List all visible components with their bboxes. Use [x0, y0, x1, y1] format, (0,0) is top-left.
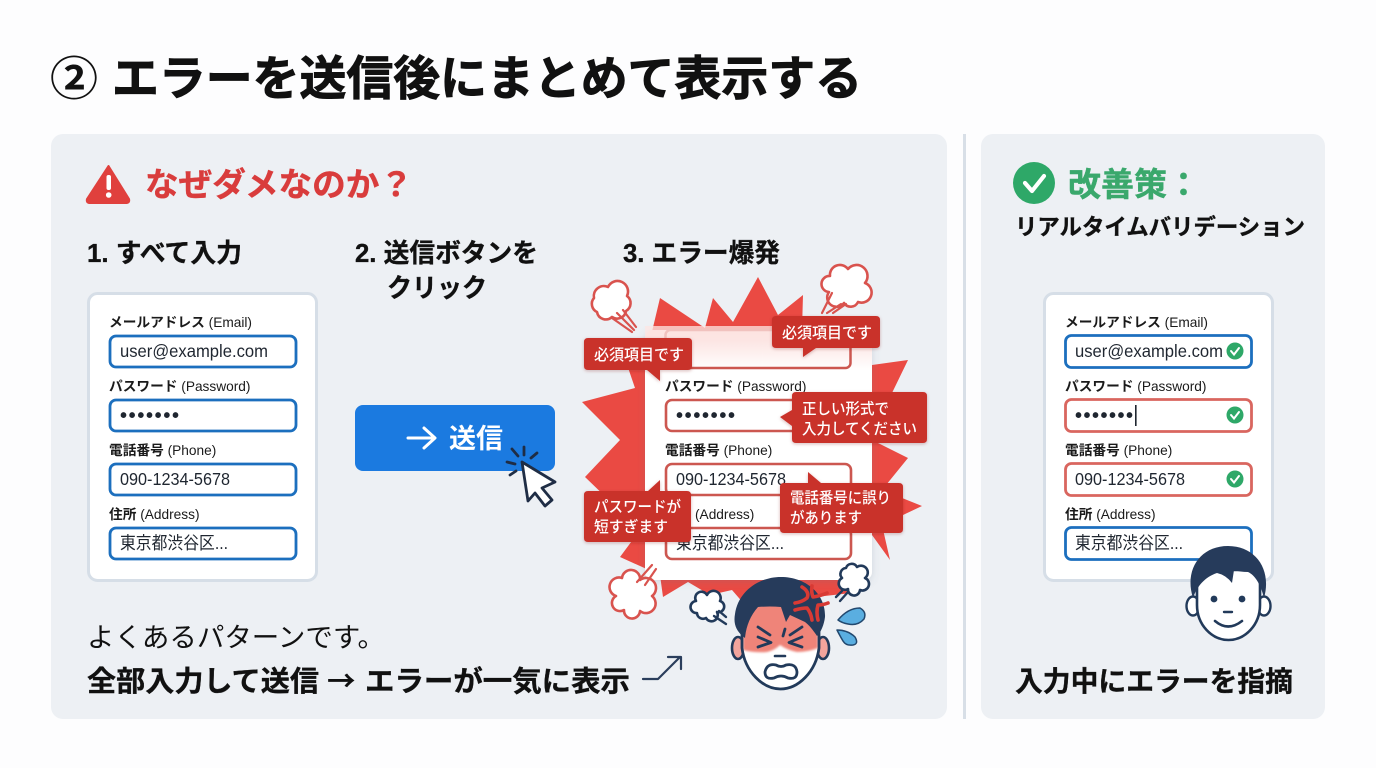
icon: dark puff right of face — [836, 564, 869, 601]
step 2 heading: クリック — [387, 273, 487, 303]
form: step 1: 090-1234-5678 — [120, 469, 230, 489]
text cursor — [1135, 405, 1137, 426]
button: send — [355, 405, 555, 471]
icon: mouse cursor with click rays — [507, 447, 555, 506]
icon: red puff top-right — [821, 265, 872, 313]
icon: green check — [1013, 162, 1055, 204]
error bubble: password too short: 短すぎます — [594, 518, 668, 536]
icon: valid check password — [1226, 406, 1244, 424]
form: step 1: user@example.com — [120, 341, 268, 361]
form: realtime validation — [1044, 294, 1272, 580]
error bubble: required 2 — [772, 316, 880, 357]
icon: red puff top-left — [592, 281, 636, 332]
icon: valid check email — [1226, 342, 1244, 360]
form: step 1: メールアドレス (Email) — [109, 315, 252, 330]
icon: valid check phone — [1226, 470, 1244, 488]
error bubble: phone number — [780, 472, 903, 533]
form: realtime validation: 住所 (Address) — [1065, 506, 1156, 522]
step 1 heading: 1. すべて入力 — [87, 238, 242, 268]
text: enter all then errors: → — [327, 659, 356, 700]
icon: angry face — [732, 577, 829, 689]
error bubble: format: 正しい形式で — [802, 400, 889, 418]
form: realtime validation: ••••••• — [1075, 405, 1133, 427]
error bubble: required 2: 必須項目です — [782, 324, 872, 342]
error bubble: phone number: があります — [790, 508, 862, 527]
form: step 1: ••••••• — [120, 405, 179, 427]
error bubble: format: 入力してください — [802, 420, 917, 438]
error bubble: password too short: パスワードが — [594, 497, 681, 516]
title: ② — [50, 53, 98, 105]
panel: improvement — [981, 134, 1325, 719]
form: error state: ••••••• — [676, 405, 735, 427]
text: enter all then errors — [87, 659, 630, 700]
title: エラーを送信後にまとめて表示する — [112, 52, 862, 105]
icon: warning triangle — [87, 166, 129, 203]
text: point out while typing: 入力中にエラーを指摘 — [1015, 666, 1293, 697]
form: step 1: 住所 (Address) — [109, 506, 200, 522]
icon: red puff bottom-left — [610, 565, 656, 619]
step 2 heading: 2. 送信ボタンを — [355, 238, 538, 268]
form: error state — [645, 326, 872, 580]
icon: sweat drops — [837, 608, 865, 645]
button: send: 送信 — [449, 424, 503, 454]
error bubble: password too short — [584, 480, 691, 542]
panel: why it is bad — [51, 134, 947, 719]
error bubble: phone number: 電話番号に誤り — [790, 489, 891, 507]
divider — [963, 134, 966, 719]
step 3 heading: 3. エラー爆発 — [623, 238, 780, 268]
subheading: realtime validation: リアルタイムバリデーション — [1015, 214, 1305, 240]
error bubble: format — [780, 392, 927, 443]
form: realtime validation: 電話番号 (Phone) — [1065, 443, 1172, 458]
explosion starburst — [582, 277, 922, 605]
form: step 1: 東京都渋谷区... — [120, 533, 228, 553]
form: error state: 電話番号 (Phone) — [665, 443, 772, 458]
text: enter all then errors: 全部入力して送信 — [87, 666, 319, 698]
form: realtime validation: user@example.com — [1075, 341, 1223, 361]
heading: why: なぜダメなのか？ — [145, 166, 413, 203]
form: error state: 東京都渋谷区... — [676, 533, 784, 553]
form: step 1 — [88, 294, 316, 580]
form: step 1: 電話番号 (Phone) — [109, 443, 216, 458]
icon: dark puff left of face — [690, 591, 726, 624]
text: enter all then errors: エラーが一気に表示 — [365, 665, 630, 698]
form: realtime validation: パスワード (Password) — [1065, 379, 1206, 394]
form: error state: パスワード (Password) — [665, 379, 806, 394]
form: realtime validation: 090-1234-5678 — [1075, 469, 1185, 489]
step 2 heading — [355, 238, 538, 303]
icon: happy face — [1186, 546, 1270, 640]
icon: anger mark — [795, 586, 828, 620]
heading: improvement: 改善策： — [1068, 166, 1200, 203]
error bubble: required 1 — [584, 338, 692, 381]
text: common pattern: よくあるパターンです。 — [87, 623, 385, 653]
form: error state: (Address) — [695, 507, 754, 522]
arrow: pointing to explosion — [643, 657, 681, 679]
form: realtime validation: メールアドレス (Email) — [1065, 315, 1208, 330]
form: realtime validation: 東京都渋谷区... — [1075, 533, 1183, 553]
error bubble: required 1: 必須項目です — [594, 346, 684, 364]
form: step 1: パスワード (Password) — [109, 379, 250, 394]
form: error state: 090-1234-5678 — [676, 469, 786, 489]
